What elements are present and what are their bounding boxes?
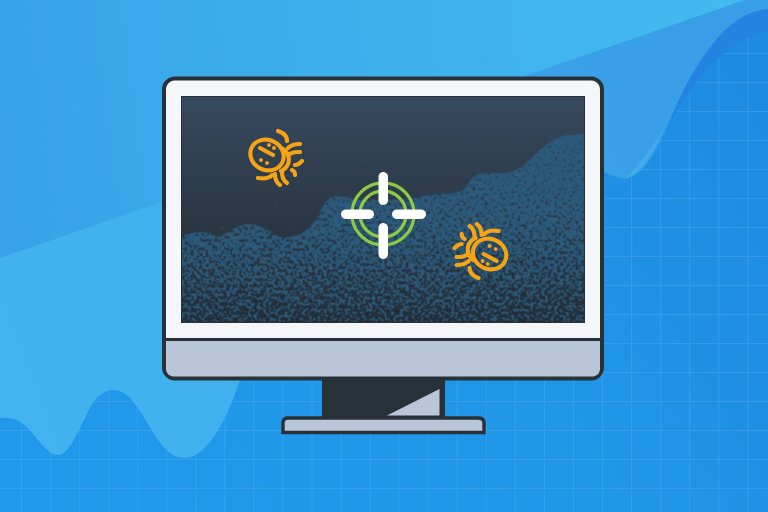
monitor stand [322, 376, 445, 418]
dark band along the right mountain [664, 9, 768, 128]
light sliver at the curve base [624, 128, 664, 179]
icon: bug top left [245, 131, 302, 185]
monitor [164, 78, 602, 432]
monitor chin [166, 340, 600, 376]
stippled area chart [182, 134, 584, 322]
icon: crosshair target [341, 172, 426, 259]
monitor body [164, 78, 602, 378]
icon: bug bottom right [455, 224, 511, 278]
screen [181, 96, 585, 323]
monitor base [283, 418, 484, 432]
